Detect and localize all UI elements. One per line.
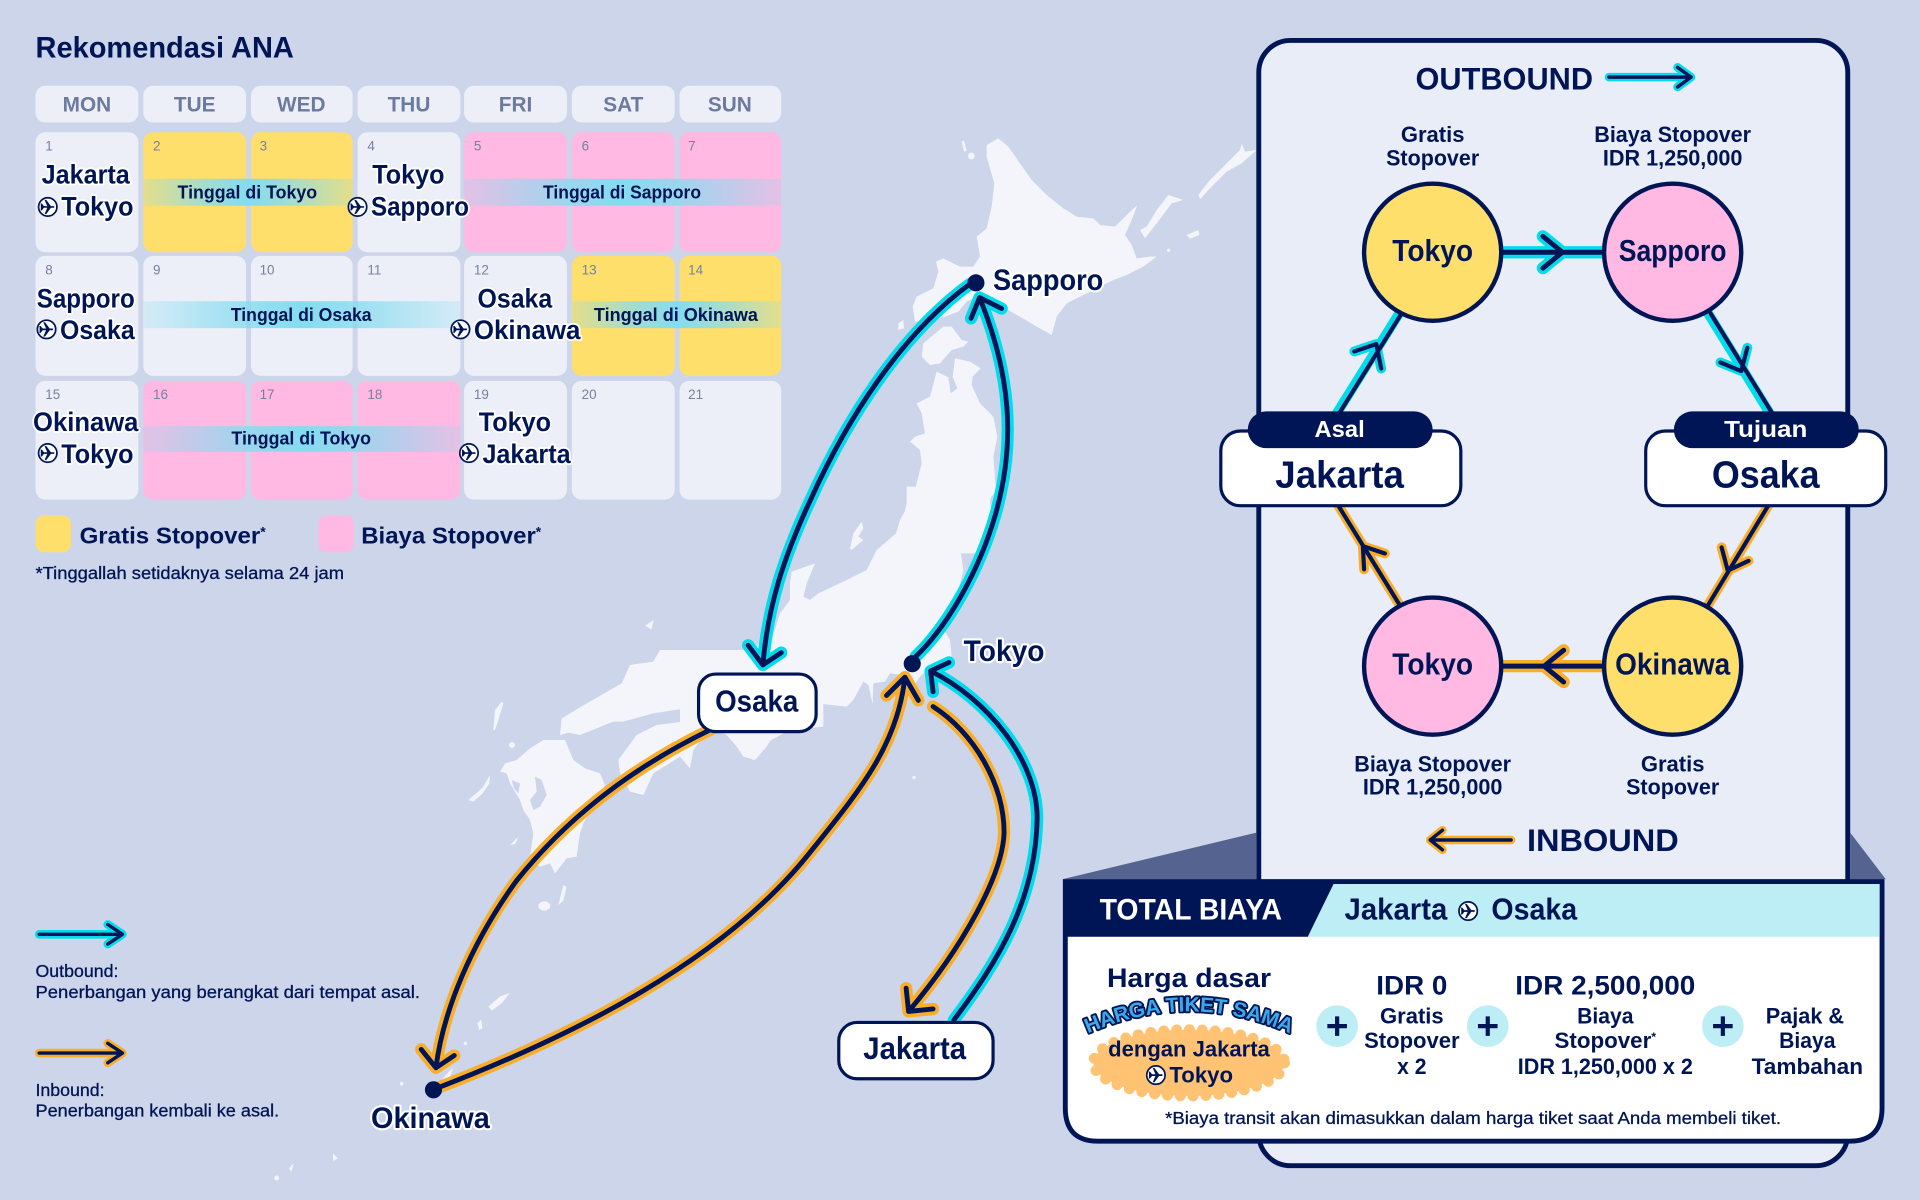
label: Tokyo stopover fee: IDR 1,250,000 <box>1363 775 1502 800</box>
free stopover amount: x 2 <box>1397 1054 1427 1079</box>
legend text: inbound: Penerbangan kembali ke asal. <box>36 1101 279 1121</box>
origin box: Jakarta: Asal <box>1314 416 1365 442</box>
map box: Jakarta: Jakarta <box>863 1030 966 1066</box>
flight route: Okinawa to Tokyo inbound <box>436 677 918 1089</box>
heading: outbound <box>1416 60 1691 96</box>
flight day 19: Tokyo to Jakarta <box>460 407 572 469</box>
map marker: Sapporo: Sapporo <box>993 264 1103 297</box>
stay band: Okinawa, days 13-14: Tinggal di Okinawa <box>594 304 759 325</box>
map marker: Okinawa <box>371 1081 490 1135</box>
flight day 19: Tokyo to Jakarta: Tokyo <box>479 407 551 437</box>
weekday header row: TUE <box>174 93 216 116</box>
destination box: Osaka: Tujuan <box>1724 416 1807 442</box>
plus sign 2 <box>1467 1005 1509 1047</box>
stay band: Sapporo, days 5-7: Tinggal di Sapporo <box>543 181 701 202</box>
flight day 1: Jakarta to Tokyo: Tokyo <box>61 192 133 222</box>
legend text: inbound <box>36 1080 279 1121</box>
footnote: transit fee: *Biaya transit akan dimasukkan dalam harga tiket saat Anda membeli tiket. <box>1165 1108 1781 1128</box>
node: Tokyo outbound <box>1364 184 1501 321</box>
Hokkaido and northern Honshu <box>890 138 1257 553</box>
legend text: outbound <box>36 961 420 1002</box>
label: Sapporo stopover fee: Biaya Stopover <box>1594 122 1751 147</box>
calendar week 2: 13 <box>582 262 597 277</box>
stay band: Tokyo, days 2-3 <box>143 179 353 206</box>
central Honshu <box>680 487 1000 779</box>
flight day 15: Okinawa to Tokyo <box>33 407 139 469</box>
label: Tokyo stopover fee: Biaya Stopover <box>1354 751 1511 776</box>
western Honshu, Shikoku and Kyushu <box>464 650 823 1045</box>
route: Jakarta to Tokyo <box>1337 315 1401 413</box>
flight day 8: Sapporo to Osaka: Sapporo <box>37 283 135 313</box>
route: Sapporo to Osaka <box>1708 313 1772 413</box>
map marker: Tokyo <box>904 635 1044 672</box>
calendar week 3: 15 <box>45 387 60 402</box>
stay band: Tokyo, days 16-18: Tinggal di Tokyo <box>231 427 371 448</box>
flight day 4: Tokyo to Sapporo <box>348 160 469 222</box>
flight day 4: Tokyo to Sapporo: Tokyo <box>372 160 444 190</box>
label: Tokyo free stopover: Gratis <box>1401 122 1464 147</box>
flight route: Tokyo to Sapporo outbound <box>916 298 1008 656</box>
calendar week 1 <box>36 132 781 252</box>
legend: inbound arrow <box>39 1043 122 1063</box>
taxes and fees: Biaya <box>1779 1028 1836 1053</box>
paid stopover amount: IDR 1,250,000 x 2 <box>1518 1054 1693 1079</box>
destination box: Osaka: Osaka <box>1712 454 1820 496</box>
origin box: Jakarta <box>1221 411 1461 506</box>
calendar week 3: 17 <box>260 387 275 402</box>
weekday header row: SAT <box>603 93 644 116</box>
header tab: total biaya: TOTAL BIAYA <box>1100 894 1282 927</box>
label: Tokyo free stopover: Stopover <box>1386 145 1480 170</box>
taxes and fees <box>1752 1004 1863 1079</box>
legend text: inbound: Inbound: <box>36 1080 105 1100</box>
weekday header row: WED <box>277 93 325 116</box>
calendar <box>33 86 781 500</box>
map box: Jakarta <box>839 1022 993 1079</box>
free stopover amount <box>1364 970 1460 1079</box>
panel: route diagram <box>1221 40 1886 1166</box>
legend: paid stopover: * <box>536 524 542 539</box>
base fare <box>1082 963 1292 1102</box>
legend text: outbound: Penerbangan yang berangkat dari tempat asal. <box>36 982 420 1002</box>
flight route: Sapporo to Osaka outbound <box>748 284 970 665</box>
node: Okinawa: Okinawa <box>1615 648 1731 682</box>
header tab: total biaya <box>1065 882 1335 937</box>
calendar week 1: 7 <box>688 139 696 154</box>
base fare: Harga dasar <box>1107 963 1272 993</box>
flight day 15: Okinawa to Tokyo: Okinawa <box>33 407 139 437</box>
flight day 19: Tokyo to Jakarta: Jakarta <box>482 439 572 469</box>
legend: outbound arrow <box>39 924 122 944</box>
label: Tokyo stopover fee <box>1354 751 1511 800</box>
calendar week 3: 19 <box>474 387 489 402</box>
stay band: Sapporo, days 5-7 <box>464 179 781 206</box>
header strip: route: Jakarta <box>1344 893 1448 927</box>
weekday header row: THU <box>388 93 430 116</box>
flight day 12: Osaka to Okinawa <box>451 283 581 345</box>
origin box: Jakarta: Jakarta <box>1275 454 1405 496</box>
calendar week 1: 1 <box>45 139 53 154</box>
map box: Osaka: Osaka <box>715 684 799 718</box>
paid stopover amount: * <box>1651 1030 1656 1044</box>
free stopover amount: Gratis <box>1380 1004 1444 1029</box>
flight route: Osaka to Okinawa inbound <box>421 730 710 1068</box>
calendar week 1: 4 <box>367 139 375 154</box>
calendar week 1: 6 <box>582 139 589 154</box>
panel: total cost <box>1062 879 1884 1144</box>
flight day 1: Jakarta to Tokyo <box>39 160 133 222</box>
stay band: Okinawa, days 13-14 <box>572 301 781 328</box>
stay band: Osaka, days 9-11: Tinggal di Osaka <box>231 304 372 325</box>
map of Japan <box>274 138 1257 1180</box>
legend: free stopover: Gratis Stopover <box>80 523 254 549</box>
calendar week 1: 3 <box>260 139 267 154</box>
flight day 12: Osaka to Okinawa: Okinawa <box>474 315 581 345</box>
label: Sapporo stopover fee: IDR 1,250,000 <box>1603 145 1742 170</box>
flight day 1: Jakarta to Tokyo: Jakarta <box>42 160 131 190</box>
calendar week 3: 16 <box>153 387 168 402</box>
destination box: Osaka <box>1646 411 1886 506</box>
panel fold: right <box>1850 833 1886 879</box>
calendar week 2: 14 <box>688 262 704 277</box>
base fare: dengan Jakarta <box>1108 1037 1271 1062</box>
map marker: Tokyo: Tokyo <box>964 635 1044 668</box>
weekday header row: SUN <box>708 93 752 116</box>
calendar week 1: 2 <box>153 139 161 154</box>
label: Tokyo free stopover <box>1386 122 1480 170</box>
free stopover amount: Stopover <box>1364 1028 1460 1053</box>
plus sign 3 <box>1702 1005 1744 1047</box>
label: Okinawa free stopover <box>1626 751 1720 800</box>
flight day 4: Tokyo to Sapporo: Sapporo <box>371 192 469 222</box>
paid stopover amount <box>1515 970 1695 1079</box>
calendar week 3 <box>36 381 781 500</box>
stay band: Tokyo, days 2-3: Tinggal di Tokyo <box>178 181 317 202</box>
label: Okinawa free stopover: Stopover <box>1626 775 1720 800</box>
flight route: Jakarta to Tokyo outbound <box>931 662 1037 1020</box>
route: Tokyo to Sapporo <box>1504 236 1602 268</box>
flight route: Tokyo to Jakarta inbound <box>906 707 1004 1011</box>
legend: paid stopover: Biaya Stopover <box>361 523 531 549</box>
calendar week 2: 12 <box>474 262 489 277</box>
heading: Rekomendasi ANA: Rekomendasi ANA <box>36 32 294 65</box>
calendar week 3: 21 <box>688 387 703 402</box>
legend: free stopover: * <box>260 524 266 539</box>
flight day 8: Sapporo to Osaka: Osaka <box>60 315 136 345</box>
legend text: outbound: Outbound: <box>36 961 118 981</box>
weekday header row: MON <box>63 93 111 116</box>
calendar week 2 <box>36 256 781 376</box>
node: Tokyo inbound: Tokyo <box>1392 648 1473 682</box>
heading: outbound: OUTBOUND <box>1416 60 1593 96</box>
calendar week 2: 9 <box>153 262 161 277</box>
flight day 8: Sapporo to Osaka <box>37 283 136 345</box>
heading: inbound: INBOUND <box>1527 822 1679 858</box>
legend: free stopover <box>36 516 266 552</box>
calendar week 2: 11 <box>367 262 381 277</box>
calendar week 3: 20 <box>582 387 597 402</box>
map box: Osaka <box>699 674 816 732</box>
node: Sapporo: Sapporo <box>1619 234 1727 268</box>
map marker: Okinawa: Okinawa <box>371 1102 490 1135</box>
plus sign 1 <box>1316 1005 1358 1047</box>
route: Okinawa to Tokyo <box>1504 650 1602 682</box>
taxes and fees: Pajak & <box>1766 1004 1844 1029</box>
weekday header row: FRI <box>499 93 532 116</box>
flight day 12: Osaka to Okinawa: Osaka <box>478 283 553 313</box>
route: Tokyo to Jakarta <box>1338 506 1400 605</box>
header strip: route <box>1298 884 1880 937</box>
base fare: Tokyo <box>1169 1062 1233 1087</box>
free stopover amount: IDR 0 <box>1376 970 1447 1000</box>
node: Tokyo outbound: Tokyo <box>1392 234 1473 268</box>
label: Sapporo stopover fee <box>1594 122 1751 170</box>
base fare: HARGA TIKET SAMA <box>1082 995 1292 1035</box>
paid stopover amount: Stopover <box>1554 1028 1650 1053</box>
taxes and fees: Tambahan <box>1752 1054 1863 1079</box>
legend: paid stopover <box>318 516 542 552</box>
label: Okinawa free stopover: Gratis <box>1641 751 1704 776</box>
footnote: minimum stay: *Tinggallah setidaknya selama 24 jam <box>36 563 344 583</box>
paid stopover amount: IDR 2,500,000 <box>1515 970 1695 1000</box>
calendar week 1: 5 <box>474 139 481 154</box>
paid stopover amount: Biaya <box>1577 1004 1634 1029</box>
header strip: route: Osaka <box>1491 893 1578 927</box>
panel fold: left <box>1063 833 1256 879</box>
flight day 15: Okinawa to Tokyo: Tokyo <box>61 439 133 469</box>
node: Okinawa <box>1604 598 1741 735</box>
calendar week 2: 8 <box>45 262 53 277</box>
heading: inbound <box>1430 822 1679 858</box>
stay band: Tokyo, days 16-18 <box>143 426 460 452</box>
route: Osaka to Okinawa <box>1708 506 1768 605</box>
calendar week 2: 10 <box>260 262 275 277</box>
base fare: HARGA TIKET SAMA <box>1081 993 1297 1038</box>
southern islands <box>431 1068 453 1093</box>
node: Tokyo inbound <box>1364 598 1501 735</box>
weekday header row <box>36 86 781 122</box>
stay band: Osaka, days 9-11 <box>143 301 460 328</box>
node: Sapporo <box>1604 184 1741 321</box>
calendar week 3: 18 <box>367 387 382 402</box>
